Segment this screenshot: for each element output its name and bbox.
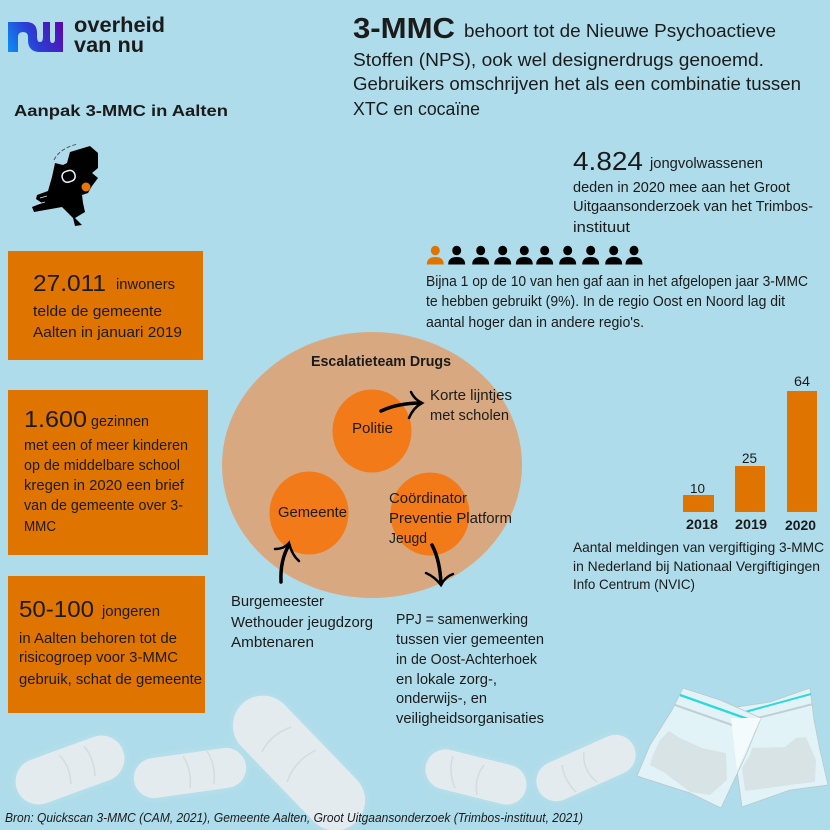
text: chart caption: Aantal meldingen van vergiftiging 3-MMC	[573, 539, 824, 555]
panel: gezinnen: met een of meer kinderen	[24, 437, 188, 454]
logo: overheid van nu: van nu	[74, 34, 144, 57]
text: 4.824 jongvolwassenen: jongvolwassenen	[649, 155, 763, 172]
text: chart caption	[573, 539, 824, 592]
text: 1 op de 10: Bijna 1 op de 10 van hen gaf aan in het afgelopen jaar 3-MMC	[426, 273, 808, 290]
circle: Politie: Politie	[352, 420, 393, 437]
bar chart: meldingen	[683, 373, 817, 533]
text: 4.824 jongvolwassenen: 4.824	[573, 146, 643, 176]
diagram: Escalatieteam Drugs: Escalatieteam Drugs	[311, 353, 451, 370]
bar chart: meldingen: 25	[742, 450, 757, 466]
arrow: Politie to scholen	[381, 392, 422, 418]
text: Burgemeester: Ambtenaren	[231, 634, 314, 651]
panel: gezinnen: van de gemeente over 3-	[24, 497, 183, 514]
panel: inwoners: 27.011	[33, 270, 106, 296]
circle: Coördinator: Preventie Platform	[389, 510, 512, 527]
panel: jongeren: 50-100	[19, 596, 94, 622]
text: 1 op de 10: aantal hoger dan in andere regio's.	[426, 314, 644, 331]
circle: Gemeente: Gemeente	[278, 504, 347, 521]
panel: gezinnen: MMC	[24, 518, 56, 535]
panel: gezinnen: gezinnen	[91, 413, 149, 430]
text: PPJ: tussen vier gemeenten	[396, 631, 544, 648]
icon: map of the Netherlands	[32, 144, 98, 226]
intro text: Gebruikers omschrijven het als een combinatie tussen	[353, 74, 801, 94]
text: Korte lijntjes: Korte lijntjes	[430, 387, 512, 404]
panel: gezinnen: op de middelbare school	[24, 457, 180, 474]
bar chart: meldingen: 2018	[686, 517, 719, 532]
text: PPJ	[396, 611, 544, 727]
panel: inwoners: inwoners	[116, 276, 175, 293]
text: 1 op de 10: te hebben gebruikt (9%). In de regio Oost en Noord lag dit	[426, 293, 786, 310]
circle: Coördinator	[389, 472, 512, 556]
intro text: behoort tot de Nieuwe Psychoactieve	[464, 21, 776, 41]
circle: Coördinator: Coördinator	[389, 490, 467, 507]
panel: inwoners	[8, 251, 203, 360]
text: Burgemeester: Burgemeester	[231, 593, 324, 610]
source line: Bron: Quickscan 3-MMC (CAM, 2021), Gemeente Aalten, Groot Uitgaansonderzoek (Trimbos-instituut, 2021)	[5, 810, 583, 825]
circle: Politie	[332, 390, 412, 472]
panel: jongeren: in Aalten behoren tot de	[19, 630, 177, 647]
panel: gezinnen: kregen in 2020 een brief	[24, 477, 185, 494]
diagram: Escalatieteam Drugs	[222, 332, 522, 598]
panel: jongeren	[8, 576, 205, 713]
logo: overheid van nu	[8, 14, 165, 57]
text: 4.824 jongvolwassenen: deden in 2020 mee aan het Groot	[573, 179, 791, 196]
text: PPJ: PPJ = samenwerking	[396, 611, 528, 628]
text: 4.824 jongvolwassenen: Uitgaansonderzoek van het Trimbos-	[573, 198, 813, 215]
panel: inwoners: Aalten in januari 2019	[33, 324, 182, 341]
text: chart caption: in Nederland bij Nationaal Vergiftigingen	[573, 558, 820, 574]
intro text	[353, 13, 801, 119]
arrow: down from Coördinator	[426, 545, 453, 585]
intro text: XTC en cocaïne	[353, 99, 480, 119]
text: Korte lijntjes	[430, 387, 512, 424]
panel: jongeren: risicogroep voor 3-MMC	[19, 649, 178, 666]
bar chart: meldingen: 2019	[735, 517, 767, 532]
text: PPJ: in de Oost-Achterhoek	[396, 651, 537, 668]
heading: Aanpak 3-MMC in Aalten: Aanpak 3-MMC in Aalten	[14, 103, 228, 120]
text: PPJ: en lokale zorg-,	[396, 671, 497, 688]
panel: gezinnen: 1.600	[24, 406, 87, 432]
panel: inwoners: telde de gemeente	[33, 303, 162, 320]
bar chart: meldingen: 64	[794, 373, 810, 389]
panel: gezinnen	[8, 390, 208, 555]
bar chart: meldingen: 10	[690, 481, 705, 496]
panel: jongeren: jongeren	[101, 603, 160, 620]
circle: Coördinator: Jeugd	[389, 530, 427, 547]
illustration: plastic bags	[637, 688, 828, 808]
icons: 1 in 10 people	[427, 246, 642, 264]
panel: jongeren: gebruik, schat de gemeente	[19, 671, 202, 688]
pills illustration	[9, 683, 642, 830]
intro text: 3-MMC	[353, 13, 455, 45]
arrow: up to Gemeente	[275, 543, 299, 582]
bar chart: meldingen: 2020	[785, 518, 816, 533]
text: PPJ: onderwijs-, en	[396, 690, 487, 707]
text: Burgemeester: Wethouder jeugdzorg	[231, 614, 373, 631]
circle: Gemeente	[270, 472, 348, 554]
text: 1 op de 10	[426, 273, 808, 331]
intro text: Stoffen (NPS), ook wel designerdrugs genoemd.	[353, 50, 764, 70]
text: 4.824 jongvolwassenen	[573, 146, 813, 236]
logo: overheid van nu: overheid	[74, 14, 165, 37]
text: 4.824 jongvolwassenen: instituut	[573, 219, 631, 236]
text: Korte lijntjes: met scholen	[430, 407, 509, 424]
text: PPJ: veiligheidsorganisaties	[396, 710, 544, 727]
text: Burgemeester	[231, 593, 373, 651]
text: chart caption: Info Centrum (NVIC)	[573, 576, 695, 592]
